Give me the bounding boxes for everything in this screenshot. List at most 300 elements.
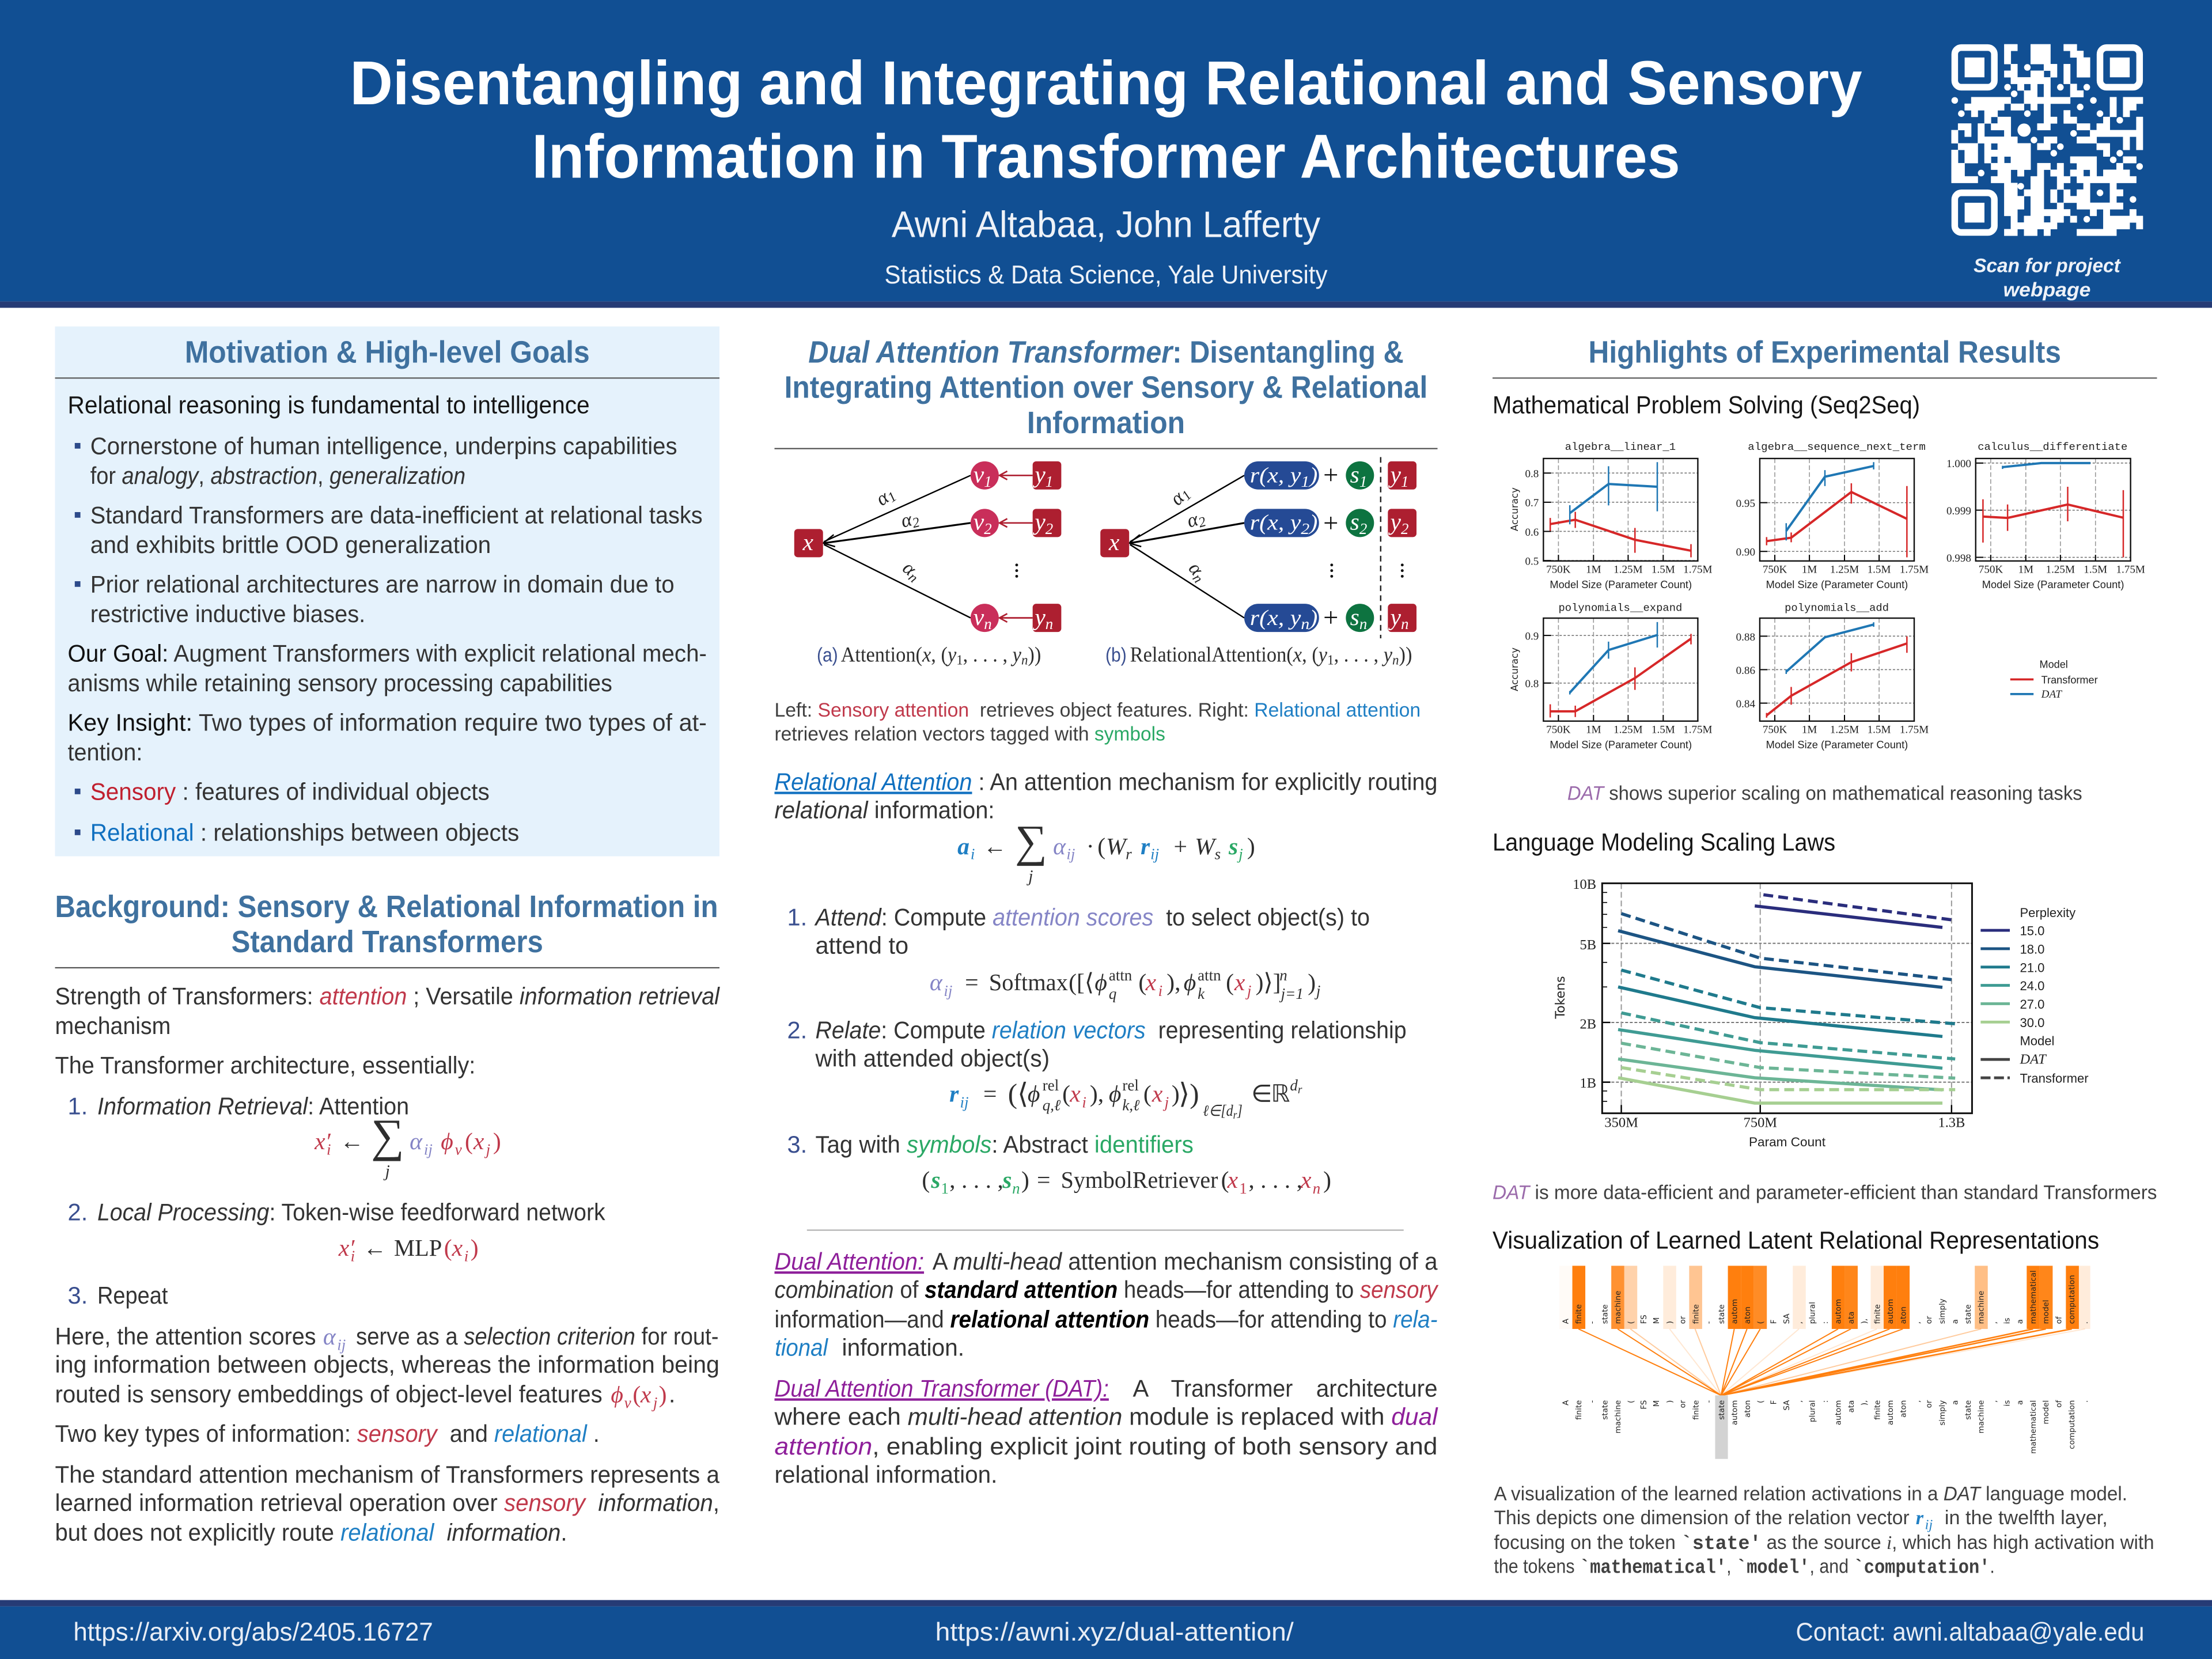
subheading: language modeling: Language Modeling Scaling Laws xyxy=(1493,829,1835,857)
equation: relation vectors: ( xyxy=(1062,1081,1070,1108)
equation: attention sum: v xyxy=(455,1141,462,1158)
text: strength of transformers: mechanism xyxy=(55,1012,171,1039)
bottom token labels: a xyxy=(1951,1400,1960,1405)
equation: relation vectors: ℓ∈[d xyxy=(1203,1102,1237,1119)
chart: polynomials__add: Model Size (Parameter Count) xyxy=(1766,739,1908,751)
equation: MLP: ← xyxy=(363,1235,387,1262)
top token labels: of xyxy=(2055,1316,2064,1324)
diagram: relational attention: 1 xyxy=(1359,473,1367,490)
definition: relational attention: relational information: xyxy=(774,796,995,823)
chart: algebra__linear_1: 0.6 xyxy=(1525,527,1539,539)
bottom token labels: M xyxy=(1653,1400,1661,1407)
equation: relation vectors: ) xyxy=(1172,1081,1180,1108)
legend: perplexity and model: DAT xyxy=(2019,1052,2047,1067)
bottom token labels: state xyxy=(1718,1400,1726,1420)
equation: relational attention update: α xyxy=(1053,834,1066,860)
bottom token labels: ) xyxy=(1666,1400,1675,1403)
equation: relation vectors: ⟩) xyxy=(1179,1078,1199,1109)
equation: softmax: ( xyxy=(1138,969,1146,996)
equation: symbol retriever: x xyxy=(1300,1167,1312,1194)
equation: relational attention update: a xyxy=(957,834,969,860)
equation: softmax: )⟩] xyxy=(1256,969,1281,996)
equation: symbol retriever: 1 xyxy=(1239,1180,1247,1197)
panel: motivation and goals xyxy=(55,327,719,857)
caption: visualization: the tokens `mathematical', `model', and `computation'. xyxy=(1494,1556,1995,1580)
top token labels: finite xyxy=(1692,1304,1700,1324)
bottom token labels: , xyxy=(1796,1400,1804,1403)
chart: polynomials__expand: 1.25M xyxy=(1613,724,1643,736)
bottom token labels: of xyxy=(2055,1400,2064,1408)
equation: relational attention update: s xyxy=(1215,845,1221,862)
equation: softmax xyxy=(930,967,1320,1002)
diagram: standard attention: 2 xyxy=(984,520,992,537)
heading: dual attention transformer xyxy=(774,335,1438,449)
top token labels: aton xyxy=(1744,1306,1752,1324)
definition: dual attention transformer: relational information. xyxy=(774,1461,997,1488)
diagram: standard attention: 1 xyxy=(1046,473,1053,490)
equation: symbol retriever: ( xyxy=(1221,1167,1229,1194)
chart: algebra__linear_1: algebra__linear_1 xyxy=(1565,441,1676,453)
text: strength of transformers: Strength of Transformers: attention ; Versatile information retrieval xyxy=(55,983,721,1010)
diagram: relational attention: α xyxy=(1166,487,1188,510)
bottom token labels: plural xyxy=(1809,1400,1817,1422)
bottom token labels: computation xyxy=(2068,1400,2077,1449)
equation: symbol retriever: , . . . , xyxy=(949,1167,1003,1194)
legend: perplexity and model: 15.0 xyxy=(2020,924,2044,938)
bottom token labels: or xyxy=(1925,1400,1934,1408)
diagram captions: , . . . , xyxy=(963,643,1013,666)
chart: calculus__differentiate: 0.998 xyxy=(1946,552,1971,565)
footer contact: Contact: awni.altabaa@yale.edu xyxy=(1796,1618,2144,1646)
equation: relational attention update: W xyxy=(1106,834,1128,860)
equation: softmax: x xyxy=(1234,969,1245,996)
top token labels: . xyxy=(2081,1321,2090,1324)
chart: algebra__linear_1: 0.5 xyxy=(1525,555,1539,567)
equation: attention sum: ij xyxy=(424,1141,433,1158)
line chart: scaling laws: 1.3B xyxy=(1938,1115,1965,1131)
equation: softmax: = xyxy=(965,969,979,996)
title: Information in Transformer Architectures xyxy=(532,122,1680,191)
heading: background: Standard Transformers xyxy=(232,925,543,959)
motivation bullets: restrictive inductive biases. xyxy=(90,600,365,627)
bottom token labels: machine xyxy=(1977,1400,1986,1433)
footer link: project page: https://awni.xyz/dual-attention/ xyxy=(935,1618,1294,1646)
chart: algebra__sequence_next_term xyxy=(1736,441,1929,590)
equation: relational attention update: j xyxy=(1026,868,1033,886)
key insight: Relational : relationships between objects xyxy=(90,819,519,846)
equation: softmax: x xyxy=(1145,969,1157,996)
step 1: information retrieval: 1. xyxy=(68,1093,88,1120)
chart: algebra__linear_1: Accuracy xyxy=(1509,487,1520,531)
definition: dual attention transformer: Dual Attention Transformer (DAT): xyxy=(774,1374,1109,1402)
equation: softmax: n xyxy=(1279,967,1287,984)
text: attention scores: j xyxy=(652,1394,657,1411)
chart: polynomials__add: 1M xyxy=(1802,724,1817,736)
chart: polynomials__expand: polynomials__expand xyxy=(1558,601,1682,614)
equation: relational attention update: s xyxy=(1228,834,1238,860)
affiliation: Statistics & Data Science, Yale University xyxy=(885,261,1327,289)
chart: algebra__linear_1: 750K xyxy=(1546,563,1571,575)
motivation bullets: Cornerstone of human intelligence, underpins capabilities xyxy=(90,433,677,460)
chart: calculus__differentiate: 1.000 xyxy=(1946,458,1971,470)
chart: polynomials__expand xyxy=(1509,601,1713,751)
caption: visualization: ij xyxy=(1925,1517,1933,1533)
legend: accuracy charts: Model xyxy=(2039,659,2068,671)
diagram: relational attention: r(x, y xyxy=(1250,606,1296,630)
key insight xyxy=(68,709,707,846)
diagram: standard attention: v xyxy=(974,509,984,536)
top token labels: , xyxy=(1796,1321,1804,1324)
bottom token labels: A xyxy=(1562,1400,1571,1406)
equation: relation vectors: r xyxy=(1233,1109,1237,1122)
subheading: mathematical problem solving: Mathematical Problem Solving (Seq2Seq) xyxy=(1493,392,1920,419)
chart: algebra__sequence_next_term: algebra__sequence_next_term xyxy=(1748,441,1926,453)
chart: algebra__linear_1: 1.25M xyxy=(1613,563,1643,575)
title: Disentangling and Integrating Relational and Sensory xyxy=(350,48,1862,118)
text: attention scores: v xyxy=(624,1394,631,1411)
line chart: scaling laws: 1B xyxy=(1580,1075,1596,1091)
top token labels: SA xyxy=(1783,1313,1791,1324)
equation: attention sum: ∑ xyxy=(371,1110,404,1161)
diagram: relational attention: s xyxy=(1350,462,1359,488)
chart: algebra__sequence_next_term: 0.95 xyxy=(1736,498,1755,510)
chart: polynomials__expand: Model Size (Parameter Count) xyxy=(1550,739,1692,751)
equation: softmax: ϕ xyxy=(1094,969,1107,996)
our goal xyxy=(68,640,707,696)
diagram captions: 1 xyxy=(956,652,963,668)
top token labels: ) xyxy=(1666,1321,1675,1324)
our goal: anisms while retaining sensory processing capabilities xyxy=(68,669,612,696)
chart: polynomials__add: 0.88 xyxy=(1736,631,1755,643)
QR caption: webpage xyxy=(2003,279,2090,301)
equation: relation vectors: r xyxy=(949,1081,959,1108)
bottom token labels: , xyxy=(1990,1400,1999,1403)
top token labels: or xyxy=(1679,1316,1688,1324)
heading: background: Background: Sensory & Relational Information in xyxy=(55,889,718,924)
step 3: repeat: 3. xyxy=(68,1282,88,1309)
text: standard attention mechanism xyxy=(55,1461,720,1546)
chart: algebra__sequence_next_term: Model Size (Parameter Count) xyxy=(1766,579,1908,590)
diagram captions: (a) xyxy=(817,645,838,666)
equation: relational attention update: · xyxy=(1086,834,1094,860)
text: attention scores: ( xyxy=(632,1381,641,1408)
line chart: scaling laws xyxy=(1554,877,2089,1149)
motivation bullets xyxy=(75,433,703,627)
top token labels: machine xyxy=(1614,1291,1623,1324)
equation: attention sum: ( xyxy=(465,1128,473,1155)
top token labels: autom xyxy=(1835,1299,1843,1324)
line chart: scaling laws: 5B xyxy=(1580,937,1596,953)
definition: relational attention xyxy=(774,768,1438,823)
top token labels: aton xyxy=(1899,1306,1908,1324)
chart: algebra__linear_1: 0.8 xyxy=(1525,468,1539,480)
definition: dual attention transformer: attention , enabling explicit joint routing of both sensory and xyxy=(774,1433,1438,1460)
top token labels: , xyxy=(1990,1321,1999,1324)
diagram: standard attention: y xyxy=(1035,462,1046,488)
bottom token labels: ( xyxy=(1756,1400,1765,1403)
diagram: relational attention: 1 xyxy=(1301,473,1309,490)
definition: dual attention transformer: architecture xyxy=(1316,1374,1438,1402)
bottom token labels: finite xyxy=(1692,1400,1700,1420)
equation: MLP: ) xyxy=(471,1235,479,1262)
chart: calculus__differentiate: calculus__differentiate xyxy=(1978,441,2127,453)
definition: relational attention: Relational Attention : An attention mechanism for explicitly routing xyxy=(774,768,1438,795)
bottom token labels: model xyxy=(2042,1400,2051,1425)
equation: softmax: attn xyxy=(1198,967,1221,984)
bottom token labels: finite xyxy=(1873,1400,1882,1420)
legend: perplexity and model: Transformer xyxy=(2020,1071,2089,1086)
equation: attention sum: ← xyxy=(340,1128,364,1155)
top token labels: : xyxy=(1821,1321,1830,1324)
key insight: tention: xyxy=(68,738,142,766)
text: attention scores: ) xyxy=(659,1381,667,1408)
diagram: relational attention: s xyxy=(1350,509,1359,536)
equation: attention sum xyxy=(314,1110,501,1180)
text: strength of transformers: The Transformer architecture, essentially: xyxy=(55,1052,475,1079)
diagram: standard attention: y xyxy=(1035,604,1046,631)
diagram captions: n xyxy=(1392,652,1399,668)
equation: relational attention update: r xyxy=(1126,845,1132,862)
equation: symbol retriever: ( xyxy=(922,1167,930,1194)
text: attention scores: routed is sensory embeddings of object-level features xyxy=(55,1380,603,1407)
equation: relation vectors: ϕ xyxy=(1109,1081,1121,1108)
equation: softmax: i xyxy=(1158,982,1162,999)
caption: visualization: This depicts one dimension of the relation vector xyxy=(1494,1507,1910,1529)
equation: softmax: k xyxy=(1198,985,1205,1002)
diagram captions: )) xyxy=(1399,643,1412,666)
step: relate: Relate: Compute relation vectors representing relationship xyxy=(816,1016,1407,1043)
chart: polynomials__expand: 1.75M xyxy=(1683,724,1713,736)
definition: dual attention: information. xyxy=(842,1334,964,1361)
text: attention scores: ing information between objects, whereas the information being xyxy=(55,1351,719,1378)
chart: algebra__sequence_next_term: 1.25M xyxy=(1830,563,1859,575)
chart: algebra__sequence_next_term: 0.90 xyxy=(1736,547,1755,559)
equation: relation vectors: ), xyxy=(1090,1081,1104,1108)
diagram: standard attention: x xyxy=(802,529,813,556)
legend: perplexity and model: 30.0 xyxy=(2020,1016,2044,1030)
equation: softmax: attn xyxy=(1109,967,1132,984)
equation: symbol retriever xyxy=(922,1167,1331,1197)
top token labels: M xyxy=(1653,1317,1661,1324)
equation: softmax: j xyxy=(1245,982,1251,999)
equation: relation vectors: ij xyxy=(960,1093,968,1111)
chart: calculus__differentiate: 750K xyxy=(1979,563,2003,575)
figure description: retrieves relation vectors tagged with symbols xyxy=(774,724,1165,745)
heading: dual attention transformer: Information xyxy=(1027,406,1185,440)
chart: calculus__differentiate: Model Size (Parameter Count) xyxy=(1982,579,2124,590)
diagram: relational attention: ) xyxy=(1308,464,1317,488)
equation: symbol retriever: ) xyxy=(1021,1167,1029,1194)
step: relate: 2. xyxy=(787,1016,807,1043)
equation: relation vectors: rel xyxy=(1043,1077,1059,1094)
chart: calculus__differentiate: 1.25M xyxy=(2046,563,2075,575)
diagram: standard attention: n xyxy=(1046,615,1053,632)
title xyxy=(350,48,1862,191)
legend: perplexity and model: Perplexity xyxy=(2020,906,2075,920)
bottom token labels: simply xyxy=(1938,1400,1947,1426)
diagram captions xyxy=(817,643,1412,668)
step: attend: Attend: Compute attention scores to select object(s) to xyxy=(814,904,1370,931)
equation: MLP: x xyxy=(452,1235,463,1262)
equation: relational attention update: W xyxy=(1195,834,1217,860)
diagram captions: y xyxy=(1381,643,1393,666)
motivation bullets: Standard Transformers are data-inefficient at relational tasks xyxy=(90,502,703,529)
line chart: scaling laws: Param Count xyxy=(1749,1135,1825,1149)
equation: relational attention update: r xyxy=(1141,834,1150,860)
diagram: relational attention: ) xyxy=(1308,606,1317,630)
diagram: relational attention: x xyxy=(1108,529,1120,556)
diagram: standard attention: y xyxy=(1035,509,1046,536)
diagram: relational attention: 2 xyxy=(1359,520,1367,537)
diagram: relational attention: n xyxy=(1190,571,1206,586)
caption: visualization: A visualization of the learned relation activations in a DAT language model. xyxy=(1494,1483,2127,1505)
legend: accuracy charts: DAT xyxy=(2041,688,2062,700)
legend: perplexity and model: 27.0 xyxy=(2020,997,2044,1012)
equation: relational attention update: ( xyxy=(1097,834,1105,860)
statement: relational reasoning: Relational reasoning is fundamental to intelligence xyxy=(68,392,590,419)
chart: polynomials__add: 1.75M xyxy=(1900,724,1929,736)
figure description: Left: Sensory attention retrieves object features. Right: Relational attention xyxy=(774,699,1421,721)
definition: dual attention transformer: where each multi-head attention module is replaced with dual xyxy=(774,1403,1438,1430)
step: attend: attend to xyxy=(816,932,908,959)
legend: perplexity and model: 21.0 xyxy=(2020,960,2044,975)
equation: MLP: i xyxy=(351,1247,355,1264)
chart: algebra__linear_1: 1.5M xyxy=(1652,563,1675,575)
equation: relation vectors: (⟨ xyxy=(1008,1078,1028,1109)
equation: softmax: ([⟨ xyxy=(1069,969,1094,996)
diagram: relational attention: + xyxy=(1323,603,1338,632)
chart: calculus__differentiate: 1.75M xyxy=(2116,563,2145,575)
text: attention scores: ϕ xyxy=(611,1381,623,1408)
QR caption: Scan for project xyxy=(1974,255,2121,277)
chart: polynomials__expand: Accuracy xyxy=(1509,647,1520,691)
bottom token labels: F xyxy=(1770,1400,1778,1404)
bottom token labels: or xyxy=(1679,1400,1688,1408)
chart: polynomials__add: 0.86 xyxy=(1736,665,1755,677)
heading: dual attention transformer: Integrating Attention over Sensory & Relational xyxy=(785,370,1427,405)
diagram: relational attention: 1 xyxy=(1401,473,1408,490)
definition: dual attention: A multi-head attention mechanism consisting of a xyxy=(933,1248,1438,1275)
bottom token labels: mathematical xyxy=(2029,1400,2038,1454)
chart: polynomials__add: 1.5M xyxy=(1868,724,1891,736)
equation: symbol retriever: s xyxy=(1002,1167,1012,1194)
definition: dual attention transformer: Transformer xyxy=(1171,1374,1293,1402)
diagram: standard attention: α xyxy=(899,508,914,532)
bottom token labels: autom xyxy=(1835,1400,1843,1425)
definition: dual attention: Dual Attention: xyxy=(774,1248,924,1275)
definition: dual attention transformer xyxy=(774,1374,1438,1488)
equation: MLP: i xyxy=(464,1247,468,1264)
equation: relational attention update xyxy=(957,816,1255,886)
bottom token labels: ata xyxy=(1847,1400,1856,1412)
caption: visualization: in the twelfth layer, xyxy=(1945,1507,2108,1529)
diagram: relational attention: + xyxy=(1323,461,1338,490)
equation: symbol retriever: s xyxy=(930,1167,941,1194)
diagram captions: RelationalAttention(x, (y xyxy=(1130,643,1328,666)
equation: relational attention update: + xyxy=(1174,834,1187,860)
top token labels: machine xyxy=(1977,1291,1986,1324)
heading: highlights: Highlights of Experimental Results xyxy=(1589,335,2061,369)
text: attention scores: x xyxy=(640,1381,652,1408)
equation: relation vectors: r xyxy=(1298,1084,1302,1096)
chart: calculus__differentiate: 1M xyxy=(2018,563,2033,575)
text: two key types: Two key types of information: sensory and relational . xyxy=(55,1420,600,1447)
QR caption xyxy=(1974,255,2121,301)
our goal: Our Goal: Augment Transformers with explicit relational mech- xyxy=(68,640,707,667)
equation: attention sum: ) xyxy=(493,1128,501,1155)
equation: softmax: ij xyxy=(944,982,952,999)
equation: relational attention update: ij xyxy=(1150,845,1159,862)
step: tag with symbols: Tag with symbols: Abstract identifiers xyxy=(816,1131,1194,1158)
bottom token labels xyxy=(1562,1400,2090,1454)
equation: relation vectors: q,ℓ xyxy=(1043,1096,1061,1113)
footer link: arxiv: https://arxiv.org/abs/2405.16727 xyxy=(73,1618,433,1646)
equation: MLP xyxy=(338,1235,479,1264)
bottom token labels: FS xyxy=(1640,1400,1649,1410)
diagram: relational attention: α xyxy=(1184,558,1208,579)
caption: math results: DAT shows superior scaling on mathematical reasoning tasks xyxy=(1567,783,2082,805)
top token labels: - xyxy=(1588,1321,1597,1324)
top token labels xyxy=(1562,1270,2090,1324)
bottom token labels: a xyxy=(2016,1400,2025,1405)
token relation visualization xyxy=(1559,1266,2090,1459)
equation: symbol retriever: ) xyxy=(1323,1167,1331,1194)
panel: background xyxy=(55,889,721,1546)
diagram captions: 1 xyxy=(1327,652,1334,668)
definition: dual attention: information—and relational attention heads—for attending to rela- xyxy=(774,1305,1438,1332)
chart: polynomials__add xyxy=(1736,601,1929,751)
equation: symbol retriever: = xyxy=(1037,1167,1050,1194)
top token labels: a xyxy=(2016,1319,2025,1324)
diagram: standard attention: v xyxy=(974,462,984,488)
step: relate: with attended object(s) xyxy=(815,1044,1050,1071)
heading: dual attention transformer: Dual Attention Transformer: Disentangling & xyxy=(808,335,1404,369)
chart: polynomials__add: 750K xyxy=(1763,724,1787,736)
equation: attention sum: α xyxy=(410,1128,423,1155)
key insight: Key Insight: Two types of information require two types of at- xyxy=(68,709,707,736)
text: standard attention mechanism: The standard attention mechanism of Transformers represents a xyxy=(55,1461,720,1488)
bottom token labels: aton xyxy=(1744,1400,1752,1418)
chart: polynomials__expand: 1.5M xyxy=(1652,724,1675,736)
diagram captions: Attention(x, (y xyxy=(841,643,957,666)
diagram: relational attention: + xyxy=(1323,509,1338,538)
step: attend xyxy=(787,904,1370,959)
equation: relation vectors: j xyxy=(1163,1093,1169,1111)
top token labels: F xyxy=(1770,1320,1778,1324)
equation: softmax: ( xyxy=(1226,969,1234,996)
diagram: relational attention xyxy=(1100,457,1416,638)
top token labels: ata xyxy=(1847,1312,1856,1324)
chart: algebra__linear_1: 1M xyxy=(1586,563,1601,575)
subheading: visualization: Visualization of Learned Latent Relational Representations xyxy=(1493,1226,2099,1254)
chart: polynomials__add: polynomials__add xyxy=(1785,601,1889,614)
equation: relation vectors: i xyxy=(1082,1093,1086,1111)
top token labels: ( xyxy=(1756,1321,1765,1324)
bottom token labels: - xyxy=(1588,1400,1597,1403)
step 1: information retrieval: Information Retrieval: Attention xyxy=(97,1093,409,1120)
chart: polynomials__add: 1.25M xyxy=(1830,724,1859,736)
chart: polynomials__expand: 0.8 xyxy=(1525,678,1539,690)
diagram captions: (b) xyxy=(1105,645,1127,666)
bottom token labels: aton xyxy=(1899,1400,1908,1418)
diagram: relational attention: n xyxy=(1301,615,1309,632)
header banner xyxy=(0,0,2212,308)
step 2: local processing: Local Processing: Token-wise feedforward network xyxy=(97,1198,605,1225)
diagram: standard attention xyxy=(794,461,1061,632)
text: strength of transformers xyxy=(55,983,721,1079)
text: standard attention mechanism: learned information retrieval operation over sensory information, xyxy=(55,1489,719,1516)
equation: relation vectors: x xyxy=(1152,1081,1163,1108)
